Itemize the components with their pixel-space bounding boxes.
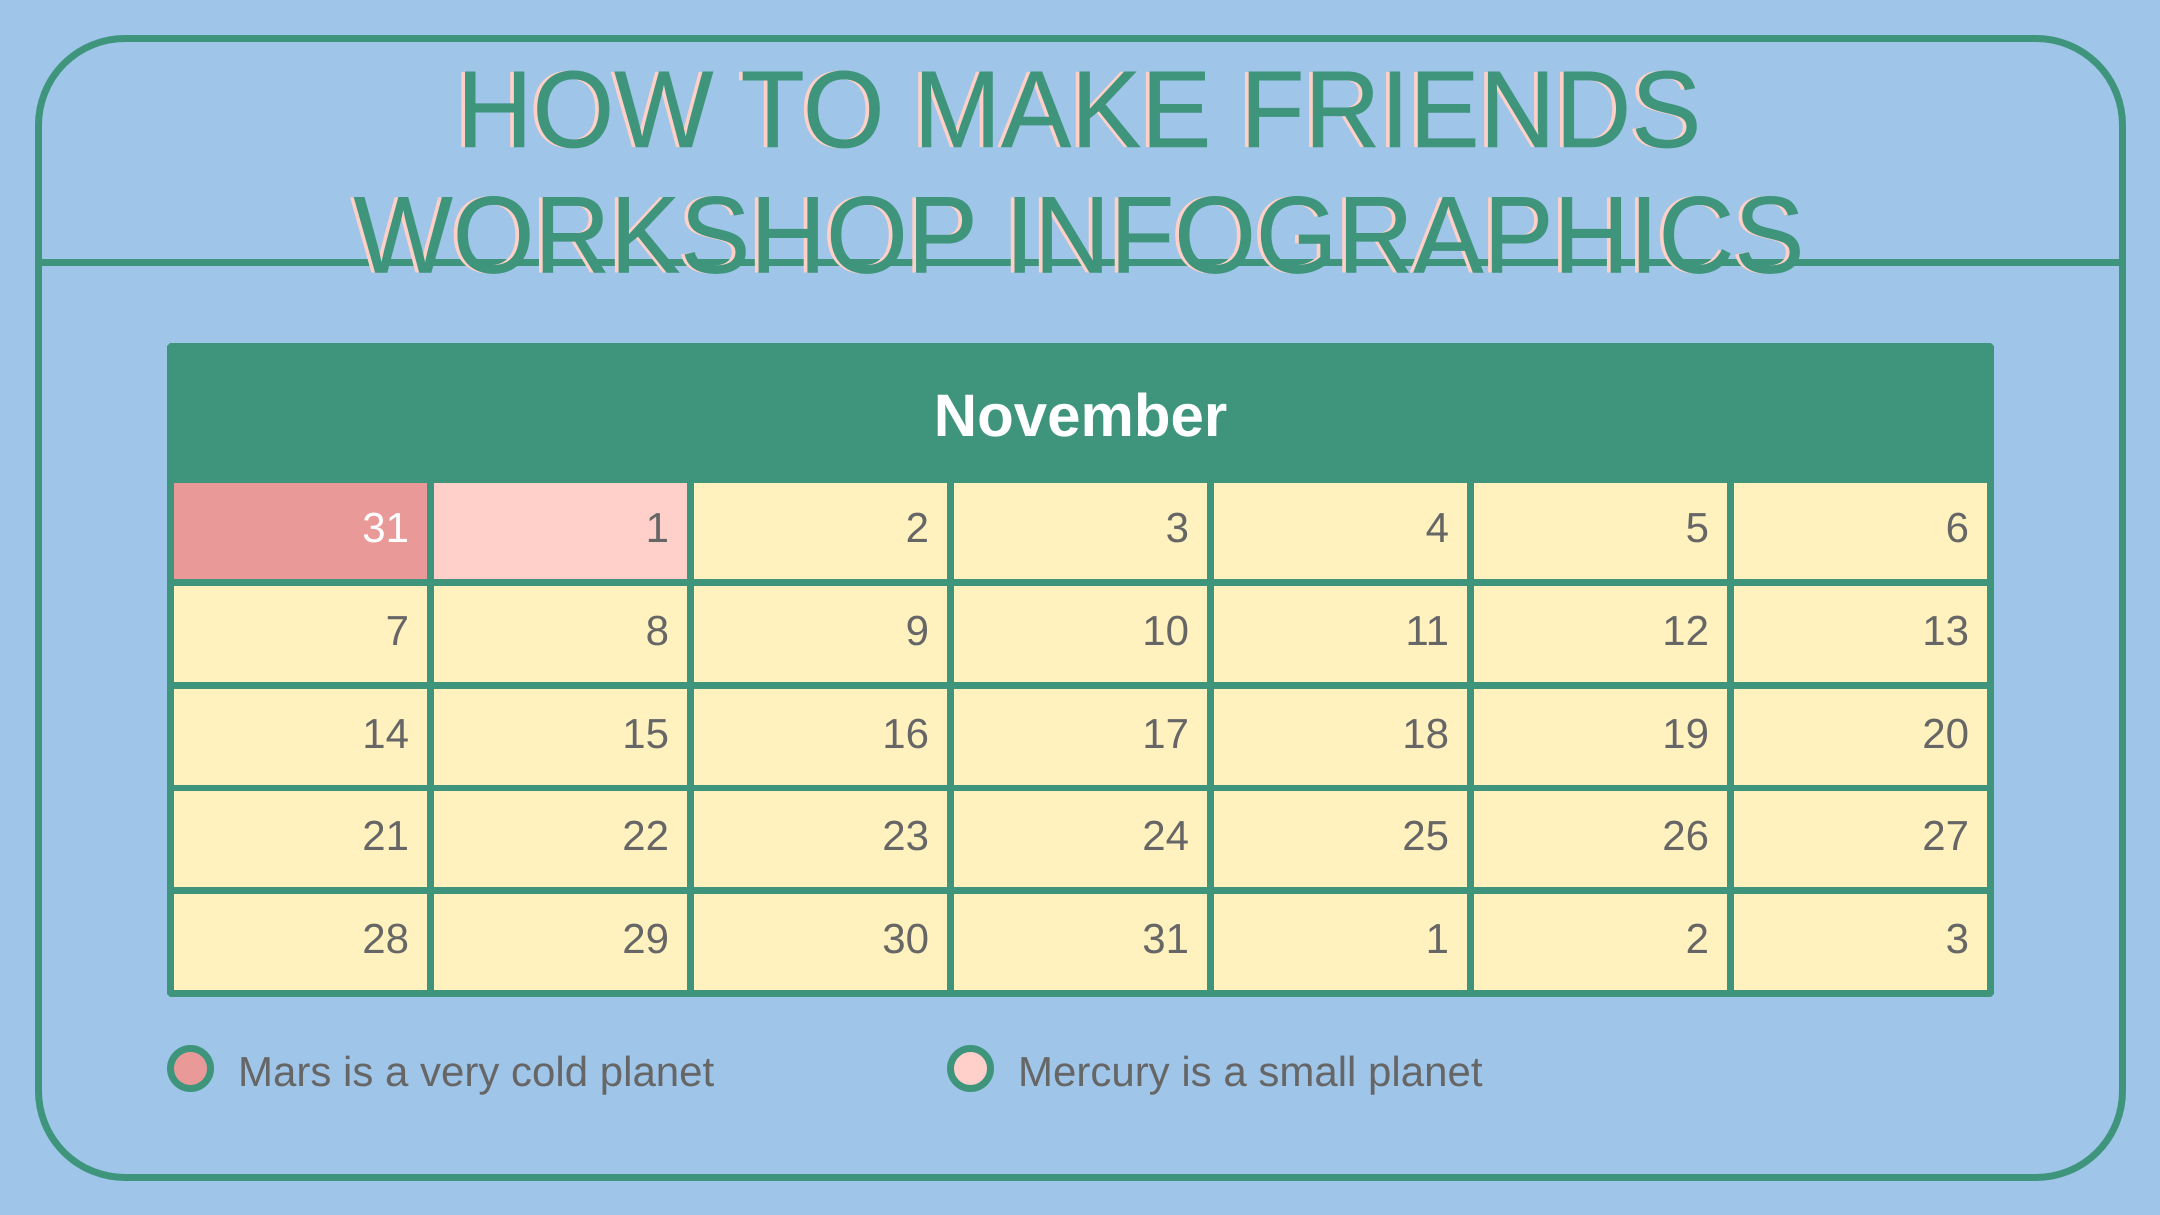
calendar week 2 [174,586,1987,682]
highlighted day: Mercury: 1 [646,504,669,551]
calendar week 5: 31 [1142,915,1189,962]
legend text: Mercury: Mercury is a small planet [1018,1048,1482,1095]
calendar week 4 [174,791,1987,887]
calendar week 2: 9 [906,607,929,654]
calendar week 2: 12 [1662,607,1709,654]
calendar week 3: 17 [1142,710,1189,757]
calendar week 4: 22 [622,812,669,859]
header divider line [35,259,2126,266]
title [350,49,1804,297]
calendar week 1: 3 [1166,504,1189,551]
calendar week 4: 25 [1402,812,1449,859]
calendar table [167,343,1994,997]
calendar week 5: 30 [882,915,929,962]
calendar week 3: 14 [362,710,409,757]
calendar week 2: 8 [646,607,669,654]
calendar week 4: 21 [362,812,409,859]
month heading: November [934,382,1227,449]
calendar week 2: 13 [1922,607,1969,654]
calendar week 1: 4 [1426,504,1449,551]
calendar week 3: 18 [1402,710,1449,757]
calendar week 2: 11 [1405,607,1449,654]
calendar week 3: 20 [1922,710,1969,757]
calendar week 1: 6 [1946,504,1969,551]
calendar week 3 [174,689,1987,785]
title: HOW TO MAKE FRIENDS [457,49,1701,171]
calendar week 5: 3 [1946,915,1969,962]
highlighted day: Mars [174,483,427,579]
calendar week 5: 1 [1426,915,1449,962]
calendar week 3: 19 [1662,710,1709,757]
calendar week 2: 7 [386,607,409,654]
calendar week 1 [174,483,1987,579]
calendar week 5: 28 [362,915,409,962]
calendar week 5 [174,894,1987,990]
calendar week 3: 15 [622,710,669,757]
calendar week 4: 26 [1662,812,1709,859]
calendar week 4: 24 [1142,812,1189,859]
calendar week 2: 10 [1142,607,1189,654]
legend text: Mars: Mars is a very cold planet [238,1048,714,1095]
calendar week 1: 5 [1686,504,1709,551]
legend marker: Mercury [947,1045,994,1092]
calendar week 5: 29 [622,915,669,962]
calendar week 4: 23 [882,812,929,859]
calendar week 4: 27 [1922,812,1969,859]
legend marker: Mars [167,1045,214,1092]
highlighted day: Mercury [434,483,687,579]
calendar week 3: 16 [882,710,929,757]
title: WORKSHOP INFOGRAPHICS [354,175,1804,297]
calendar week 1: 2 [906,504,929,551]
highlighted day: Mars: 31 [362,504,409,551]
calendar week 5: 2 [1686,915,1709,962]
